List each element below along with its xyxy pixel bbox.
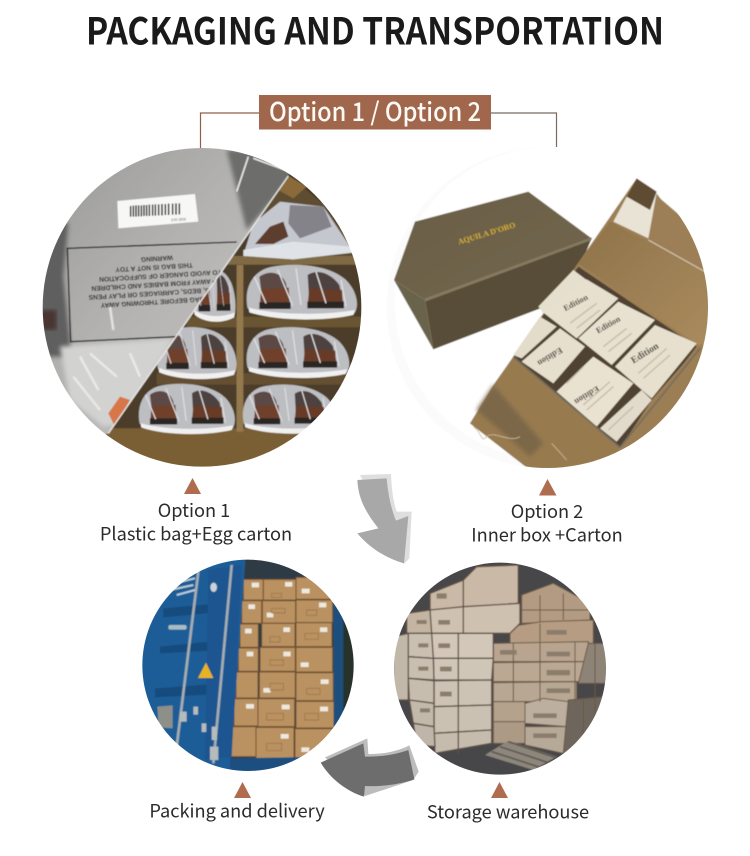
heading tag: option 1 / option 2: Option 1 / Option 2: [269, 92, 481, 129]
label: option 1: Option 1: [158, 497, 230, 523]
barcode label: [117, 194, 198, 228]
open carton with inner boxes: Edition: [573, 384, 601, 407]
connector: option 2 line: [491, 113, 556, 148]
shelves of bagged shoes: [107, 176, 367, 472]
barcode label: SIZE 10.5: [171, 217, 186, 222]
label: packing and delivery: Packing and delivery: [149, 798, 325, 824]
container door: [137, 553, 245, 777]
warning text: IN CRIBS, BEDS, CARRIAGES OR PLAY PENS: [88, 284, 234, 300]
photo: option 2 inner box and carton: [383, 143, 717, 473]
icon: option 2 marker: [539, 479, 556, 496]
arrow: warehouse to delivery: [321, 738, 419, 797]
plastic bag with warning: [40, 147, 293, 440]
open carton with inner boxes: Edition: [629, 340, 662, 366]
warning box: [67, 242, 237, 342]
icon: packing marker: [234, 782, 251, 798]
photo: option 1 plastic bag and egg carton: [40, 147, 367, 472]
label: option 2: Option 2: [511, 498, 583, 524]
open carton with inner boxes: Edition: [595, 314, 622, 335]
container edge and sky: [230, 603, 357, 773]
label: option 1: Plastic bag+Egg carton: [100, 520, 292, 546]
carton print marks: [417, 593, 570, 738]
title: PACKAGING AND TRANSPORTATION: [86, 2, 664, 56]
warning text: KEEP AWAY FROM BABIES AND CHILDREN: [91, 276, 230, 291]
warning text: [88, 255, 220, 308]
icon: warehouse marker: [491, 782, 508, 798]
warning text: THIS BAG IS NOT A TOY: [115, 261, 193, 273]
cartons in container: [231, 577, 334, 759]
warning text: UP BAG BEFORE THROWING AWAY: [100, 294, 215, 308]
pallet: [485, 741, 557, 770]
right-hand carton stacks: [493, 583, 607, 753]
carton labels: [245, 582, 329, 752]
gift box: AQUILA D'ORO: [457, 220, 517, 247]
left-hand carton stacks: [393, 565, 520, 753]
icon: option 1 marker: [184, 478, 201, 494]
label: storage warehouse: Storage warehouse: [427, 798, 589, 824]
warning text: TO AVOID DANGER OF SUFFOCATION: [99, 268, 222, 282]
carton print marks: [267, 593, 320, 751]
photo: storage warehouse: [390, 560, 610, 777]
open carton with inner boxes: Edition: [562, 293, 590, 313]
open carton with inner boxes: [470, 178, 717, 470]
connector: option 1 line: [200, 113, 259, 148]
photo: container loading: [137, 553, 357, 777]
arrow: option photos to warehouse: [357, 474, 412, 564]
label: option 2: Inner box +Carton: [471, 522, 623, 548]
open carton with inner boxes: Edition: [536, 345, 564, 369]
gift box: [394, 192, 592, 349]
warning text: WARNING: [141, 253, 173, 262]
